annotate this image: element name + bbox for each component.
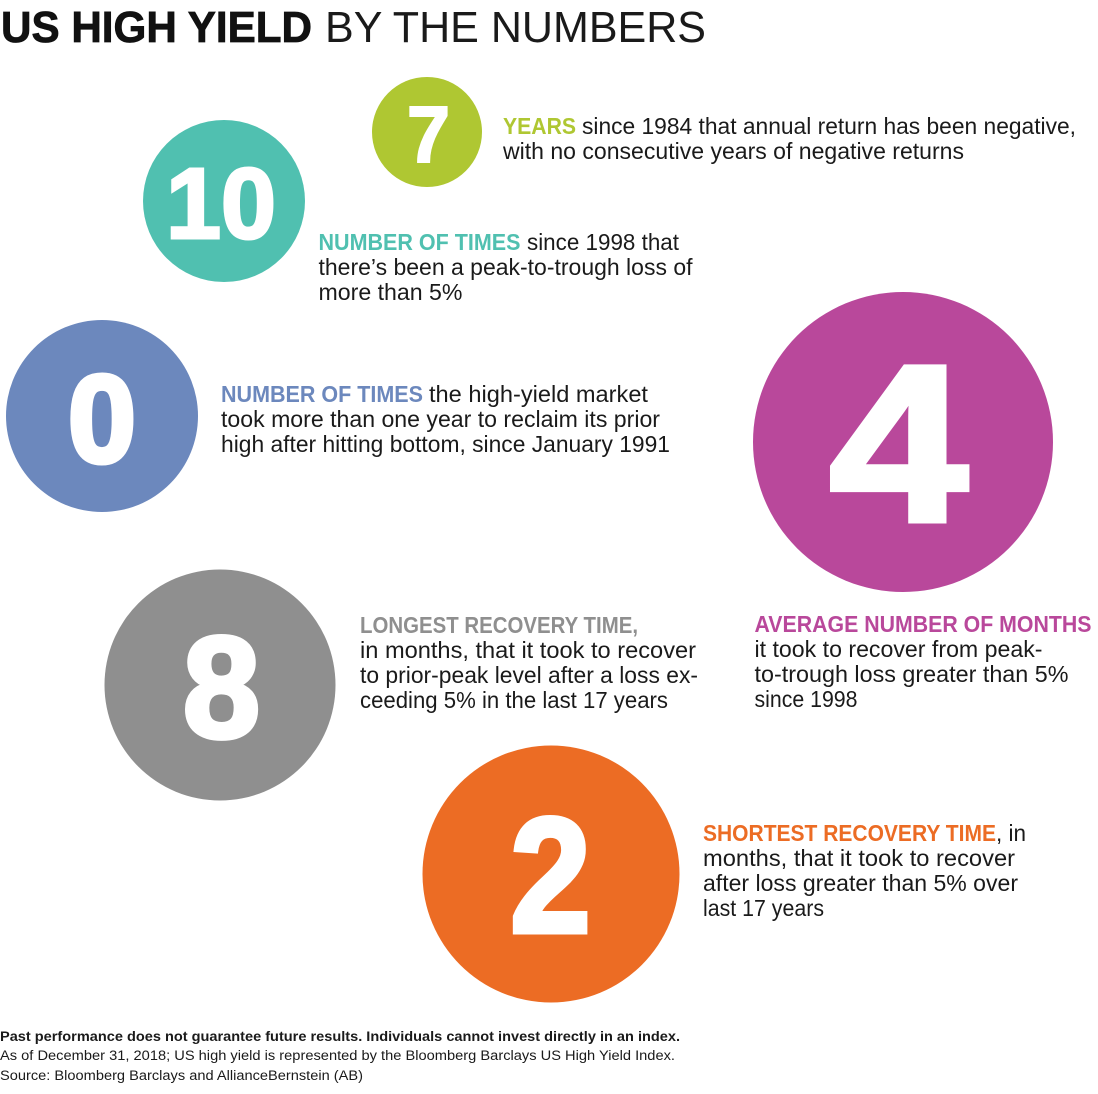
- text: 2 shortest recovery: [703, 820, 1026, 921]
- text: 7 years: [502, 113, 1076, 164]
- text: 7 years: YEARS: [503, 113, 576, 139]
- text: 0 number of times: took more than one year to reclaim its prior: [221, 406, 660, 432]
- text: 10 number of times: more than 5%: [318, 279, 463, 305]
- text: 2 shortest recovery: SHORTEST RECOVERY TIME: [703, 820, 996, 846]
- footnotes: Past performance does not guarantee future results. Individuals cannot invest directly in an index.: [0, 1029, 680, 1044]
- footnotes: [0, 1029, 680, 1083]
- title: [1, 3, 706, 52]
- text: 10 number of times: there’s been a peak-to-trough loss of: [318, 254, 693, 280]
- circle: 10: [143, 120, 305, 282]
- text: 10 number of times: NUMBER OF TIMES: [318, 229, 520, 255]
- text: 7 years: since 1984 that annual return has been negative,: [582, 113, 1076, 139]
- circle: 4: 4: [829, 319, 968, 569]
- text: 0 number of times: [221, 381, 670, 457]
- text: 8 longest recovery: in months, that it took to recover: [360, 637, 696, 663]
- circle: 0: [6, 320, 198, 512]
- text: 4 average months: it took to recover from peak-: [754, 636, 1042, 662]
- footnotes: Source: Bloomberg Barclays and AllianceBernstein (AB): [0, 1068, 363, 1083]
- text: 2 shortest recovery: , in: [996, 820, 1026, 846]
- circle: 4: [753, 292, 1053, 592]
- text: 8 longest recovery: [360, 612, 698, 713]
- text: 2 shortest recovery: last 17 years: [703, 895, 824, 921]
- circle: 0: 0: [68, 351, 136, 489]
- text: 2 shortest recovery: after loss greater than 5% over: [703, 870, 1018, 896]
- text: 0 number of times: NUMBER OF TIMES: [221, 381, 423, 407]
- footnotes: As of December 31, 2018; US high yield is represented by the Bloomberg Barclays US High Yield Index.: [0, 1048, 675, 1063]
- circle: 7: [372, 77, 482, 187]
- circle: 2: 2: [510, 784, 591, 967]
- text: 10 number of times: [318, 229, 693, 305]
- text: 2 shortest recovery: months, that it took to recover: [703, 845, 1015, 871]
- text: 4 average months: to-trough loss greater than 5%: [754, 661, 1069, 687]
- text: 4 average months: since 1998: [754, 686, 858, 712]
- text: 4 average months: [754, 611, 1092, 712]
- text: 0 number of times: the high-yield market: [429, 381, 648, 407]
- text: 8 longest recovery: to prior-peak level after a loss ex-: [360, 662, 698, 688]
- text: 7 years: with no consecutive years of negative returns: [502, 138, 964, 164]
- circle: 2: [422, 746, 680, 1002]
- circle: 7: 7: [407, 90, 450, 179]
- title: US HIGH YIELD: [1, 3, 312, 52]
- text: 8 longest recovery: ceeding 5% in the last 17 years: [360, 687, 668, 713]
- text: 10 number of times: since 1998 that: [527, 229, 679, 255]
- circle: 10: 10: [166, 148, 276, 260]
- text: 8 longest recovery: LONGEST RECOVERY TIME,: [360, 612, 638, 638]
- circle: 8: [104, 570, 336, 800]
- circle: 8: 8: [183, 607, 260, 768]
- text: 0 number of times: high after hitting bottom, since January 1991: [221, 431, 670, 457]
- title: BY THE NUMBERS: [325, 3, 706, 52]
